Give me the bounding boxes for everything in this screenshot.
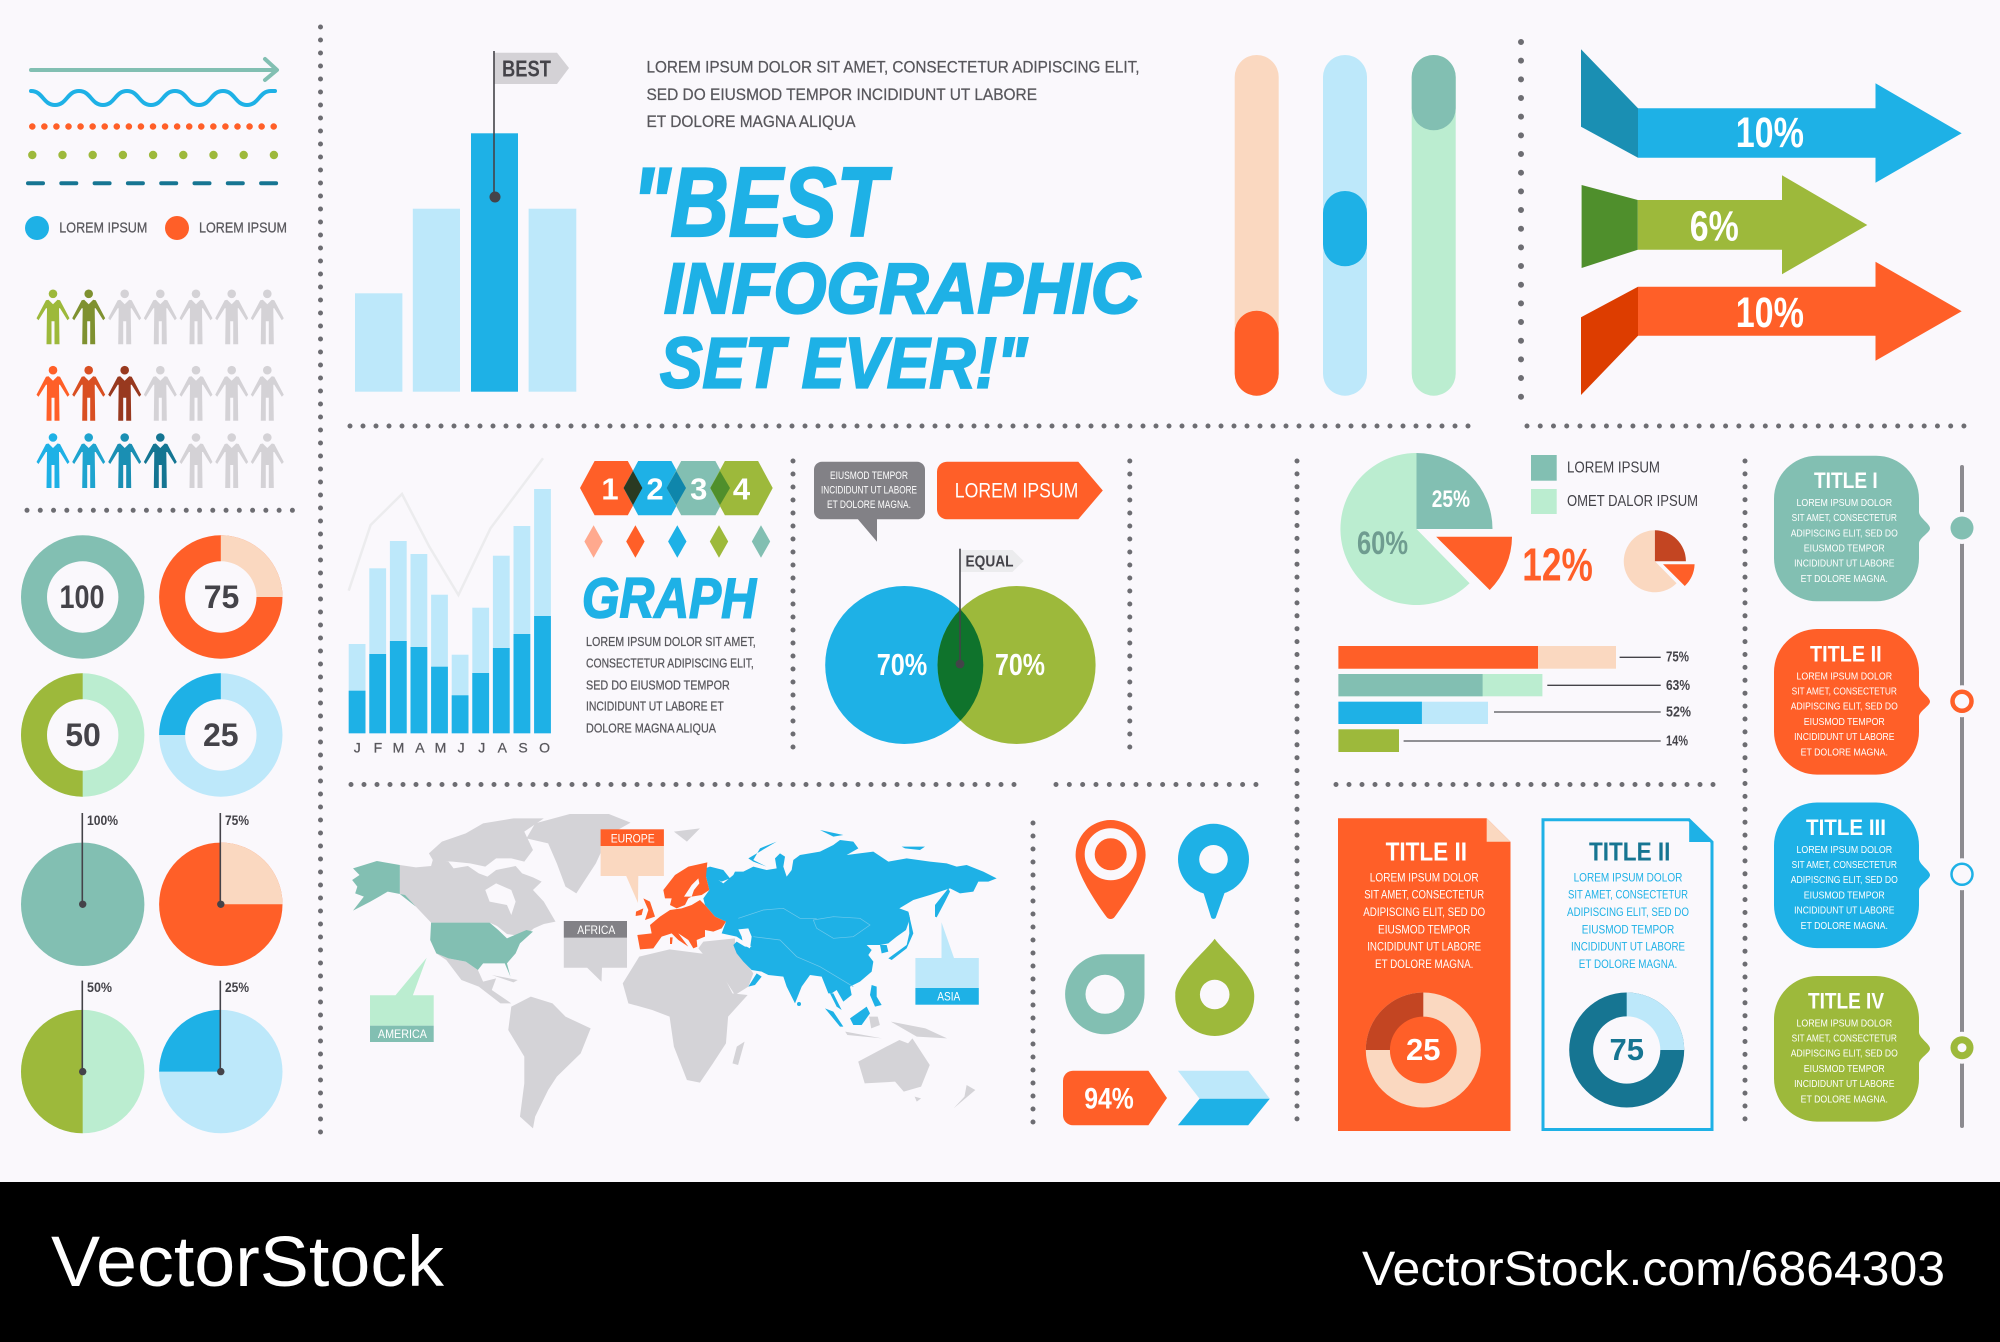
arrow: orange 10% (1581, 262, 1962, 395)
timeline card: title IV: EIUSMOD TEMPOR (1804, 1063, 1885, 1075)
callout: Europe (601, 829, 664, 903)
numbered hexagons: 3 (690, 471, 707, 506)
donut 100 (21, 535, 144, 659)
speech bubble: INCIDIDUNT UT LABORE (821, 484, 917, 496)
callout: Europe: EUROPE (611, 831, 655, 845)
venn diagram (825, 549, 1096, 744)
wave line (31, 91, 275, 105)
small diamonds (584, 525, 770, 558)
line styles panel (28, 59, 278, 183)
timeline card: title II: SIT AMET, CONSECTETUR (1792, 685, 1897, 697)
venn diagram: 70% (995, 647, 1045, 682)
bar 63% (1338, 674, 1690, 696)
donut 50: 50 (65, 717, 101, 753)
month labels: S (518, 739, 528, 755)
bar 63%: 63% (1666, 677, 1690, 694)
numbered hexagons: 2 (646, 471, 664, 506)
donut 75 in card (1569, 992, 1684, 1108)
timeline card: title I (1774, 456, 1930, 601)
Europe (636, 862, 726, 949)
venn diagram: 70% (877, 647, 927, 682)
month labels: J (354, 739, 361, 755)
pie chart with 12% slice (1340, 453, 1593, 605)
numbered hexagons: 4 (733, 471, 751, 506)
month labels: J (458, 739, 465, 755)
timeline card: title II: EIUSMOD TEMPOR (1804, 716, 1885, 728)
icon: green drop (1175, 939, 1254, 1036)
timeline card: title III: LOREM IPSUM DOLOR (1796, 844, 1892, 856)
donut 25 in card (1366, 992, 1481, 1108)
footer bar: VectorStock.com/6864303 (1362, 1243, 1945, 1296)
slider: blue (1323, 55, 1367, 396)
node 2 (1946, 685, 1978, 717)
timeline card: title I: ET DOLORE MAGNA. (1801, 573, 1888, 585)
pie chart with 12% slice: 25% (1432, 486, 1470, 513)
arrow line (31, 59, 277, 80)
graph description: CONSECTETUR ADIPISCING ELIT, (586, 655, 754, 670)
node 3 (1946, 858, 1978, 890)
pie 25%: 25% (225, 979, 249, 995)
icon: teal drop (1065, 954, 1144, 1034)
graph description: INCIDIDUNT UT LABORE ET (586, 699, 724, 714)
title: SET EVER!" (660, 325, 1028, 404)
timeline card: title III: INCIDIDUNT UT LABORE (1794, 904, 1894, 916)
bar chart with best flag (355, 51, 576, 392)
arrow: blue 10% (1581, 49, 1962, 183)
flag: equal (956, 549, 1024, 668)
timeline card: title III: ET DOLORE MAGNA. (1801, 920, 1888, 932)
timeline card: title III: TITLE III (1806, 815, 1886, 840)
monthly stacked bar chart (349, 458, 551, 755)
timeline card: title IV: LOREM IPSUM DOLOR (1796, 1017, 1892, 1029)
pictogram: people rows (36, 290, 284, 488)
node 4 (1946, 1032, 1978, 1064)
timeline card: title IV: TITLE IV (1808, 988, 1884, 1013)
timeline card: title IV: ADIPISCING ELIT, SED DO (1791, 1048, 1898, 1060)
pie 50%: 50% (87, 979, 112, 995)
month labels: J (478, 739, 485, 755)
legend: LOREM IPSUM (199, 220, 287, 236)
icon: orange map pin (1076, 820, 1146, 919)
timeline card: title II: LOREM IPSUM DOLOR (1796, 670, 1892, 682)
pie legend: LOREM IPSUM (1567, 459, 1660, 476)
intro text: ET DOLORE MAGNA ALIQUA (646, 112, 856, 131)
timeline card: title III: ADIPISCING ELIT, SED DO (1791, 874, 1898, 886)
timeline card: title I: ADIPISCING ELIT, SED DO (1791, 527, 1898, 539)
speech bubble: ET DOLORE MAGNA. (827, 499, 911, 511)
document card: orange (1338, 818, 1510, 1131)
graph heading: GRAPH (582, 567, 758, 631)
timeline card: title I: EIUSMOD TEMPOR (1804, 543, 1885, 555)
callout: Africa (564, 921, 627, 982)
timeline card: title I: LOREM IPSUM DOLOR (1796, 497, 1892, 509)
document card: blue outline: LOREM IPSUM DOLOR (1574, 870, 1682, 884)
document card: blue outline (1543, 818, 1714, 1130)
flag: equal: EQUAL (966, 554, 1014, 571)
arrow: green 6%: 6% (1690, 203, 1739, 251)
flag: best (490, 51, 569, 202)
flag: best: BEST (502, 56, 551, 82)
timeline card: title I: INCIDIDUNT UT LABORE (1794, 558, 1894, 570)
node 1 (1946, 512, 1978, 544)
timeline card: title II: ADIPISCING ELIT, SED DO (1791, 701, 1898, 713)
donut 25 (159, 673, 282, 797)
chevron ribbon (1178, 1071, 1270, 1125)
timeline card: title I: TITLE I (1814, 468, 1878, 493)
pie chart with 12% slice: 12% (1522, 538, 1593, 590)
title (632, 147, 1142, 404)
intro text: LOREM IPSUM DOLOR SIT AMET, CONSECTETUR ADIPISCING ELIT, (646, 58, 1140, 77)
pie 100%: 100% (87, 812, 118, 828)
callout: Asia (915, 922, 979, 1005)
donut 25: 25 (203, 717, 239, 753)
document card: blue outline: INCIDIDUNT UT LABORE (1571, 940, 1685, 954)
document card: orange: EIUSMOD TEMPOR (1378, 922, 1470, 936)
Hudson Bay (485, 883, 516, 915)
horizontal progress bars (1338, 646, 1691, 752)
timeline card: title I: SIT AMET, CONSECTETUR (1792, 512, 1897, 524)
green dotted line (32, 151, 274, 159)
donut 75 in card: 75 (1609, 1032, 1644, 1067)
pie 25% (159, 979, 282, 1133)
pie legend (1531, 455, 1698, 514)
Eurasia regions (636, 830, 997, 1027)
icon: blue map pin (1178, 824, 1249, 919)
pie 75% (159, 812, 282, 966)
bar 14%: 14% (1666, 732, 1688, 749)
slider: orange (1235, 55, 1279, 396)
pie 75%: 75% (225, 812, 249, 828)
tag: 94% (1063, 1071, 1167, 1125)
callout: Asia: ASIA (937, 990, 960, 1004)
timeline card: title IV: SIT AMET, CONSECTETUR (1792, 1032, 1897, 1044)
month labels: A (415, 739, 425, 755)
callout: America: AMERICA (378, 1027, 427, 1041)
USA and Alaska (352, 861, 533, 977)
timeline card: title III: EIUSMOD TEMPOR (1804, 890, 1885, 902)
donut 75: 75 (204, 579, 239, 615)
legend: LOREM IPSUM (59, 220, 147, 236)
document card: orange: INCIDIDUNT UT LABORE (1367, 940, 1481, 954)
small pie chart (1624, 530, 1695, 592)
document card: blue outline: ADIPISCING ELIT, SED DO (1567, 905, 1689, 919)
orange tag (937, 462, 1103, 519)
gray landmasses (400, 814, 975, 1128)
bar 75% (1338, 646, 1689, 669)
month labels: M (435, 739, 446, 755)
callout: America (370, 958, 434, 1042)
timeline card: title II: INCIDIDUNT UT LABORE (1794, 731, 1894, 743)
month labels: O (539, 739, 550, 755)
arrow: green 6% (1582, 175, 1867, 274)
donut 75 (159, 535, 282, 659)
title: INFOGRAPHIC (664, 250, 1142, 329)
numbered hexagons: 1 (601, 471, 619, 506)
timeline card: title IV: INCIDIDUNT UT LABORE (1794, 1078, 1894, 1090)
title: "BEST (632, 147, 892, 257)
document card: blue outline: SIT AMET, CONSECTETUR (1568, 888, 1688, 902)
teal dashed line (28, 181, 278, 185)
timeline card: title II (1774, 629, 1930, 775)
document card: orange: LOREM IPSUM DOLOR (1370, 870, 1479, 884)
Middle East (698, 938, 753, 995)
donut 100: 100 (60, 579, 104, 615)
footer bar (0, 1182, 2000, 1342)
timeline card: title II: TITLE II (1810, 641, 1882, 666)
month labels: M (393, 739, 404, 755)
document card: blue outline: ET DOLORE MAGNA. (1579, 957, 1677, 971)
document card: orange: TITLE II (1386, 837, 1467, 867)
timeline spine and nodes (1946, 467, 1978, 1126)
timeline card: title IV: ET DOLORE MAGNA. (1801, 1093, 1888, 1105)
bar 75%: 75% (1666, 649, 1689, 666)
intro text (646, 58, 1140, 131)
timeline card: title II: ET DOLORE MAGNA. (1801, 746, 1888, 758)
world map (352, 814, 997, 1128)
slider: teal (1412, 55, 1456, 396)
callout: Africa: AFRICA (577, 923, 615, 937)
graph description: DOLORE MAGNA ALIQUA (586, 720, 716, 735)
Asia (703, 830, 997, 1027)
bar 52%: 52% (1666, 704, 1691, 721)
document card: orange: ET DOLORE MAGNA. (1375, 957, 1473, 971)
graph description (586, 634, 756, 735)
month labels (354, 739, 550, 755)
speech bubble (814, 462, 925, 542)
month labels: A (498, 739, 508, 755)
document card: orange: SIT AMET, CONSECTETUR (1364, 888, 1484, 902)
month labels: F (374, 739, 382, 755)
pie 50% (21, 979, 144, 1133)
document card: blue outline: EIUSMOD TEMPOR (1582, 922, 1674, 936)
legend (25, 216, 287, 240)
orange tag: LOREM IPSUM (955, 479, 1078, 502)
timeline card: title IV (1774, 976, 1930, 1122)
bar 14% (1338, 729, 1688, 752)
tag: 94%: 94% (1084, 1082, 1134, 1115)
document card: blue outline: TITLE II (1589, 837, 1670, 867)
donut 50 (21, 673, 144, 797)
document card: orange: ADIPISCING ELIT, SED DO (1363, 905, 1485, 919)
pie 100% (21, 812, 144, 966)
timeline card: title III (1774, 802, 1930, 948)
orange dotted line (32, 123, 274, 130)
pie legend: OMET DALOR IPSUM (1567, 493, 1698, 510)
arrow: orange 10%: 10% (1736, 289, 1804, 337)
graph description: SED DO EIUSMOD TEMPOR (586, 677, 730, 692)
intro text: SED DO EIUSMOD TEMPOR INCIDIDUNT UT LABORE (646, 85, 1037, 104)
numbered hexagons (580, 461, 773, 515)
donut 25 in card: 25 (1406, 1032, 1441, 1067)
footer bar: VectorStock (51, 1223, 445, 1302)
timeline card: title III: SIT AMET, CONSECTETUR (1792, 859, 1897, 871)
bar 52% (1338, 702, 1691, 724)
speech bubble: EIUSMOD TEMPOR (830, 470, 908, 482)
arrow: blue 10%: 10% (1736, 109, 1804, 157)
pie chart with 12% slice: 60% (1357, 525, 1408, 561)
graph description: LOREM IPSUM DOLOR SIT AMET, (586, 634, 756, 649)
